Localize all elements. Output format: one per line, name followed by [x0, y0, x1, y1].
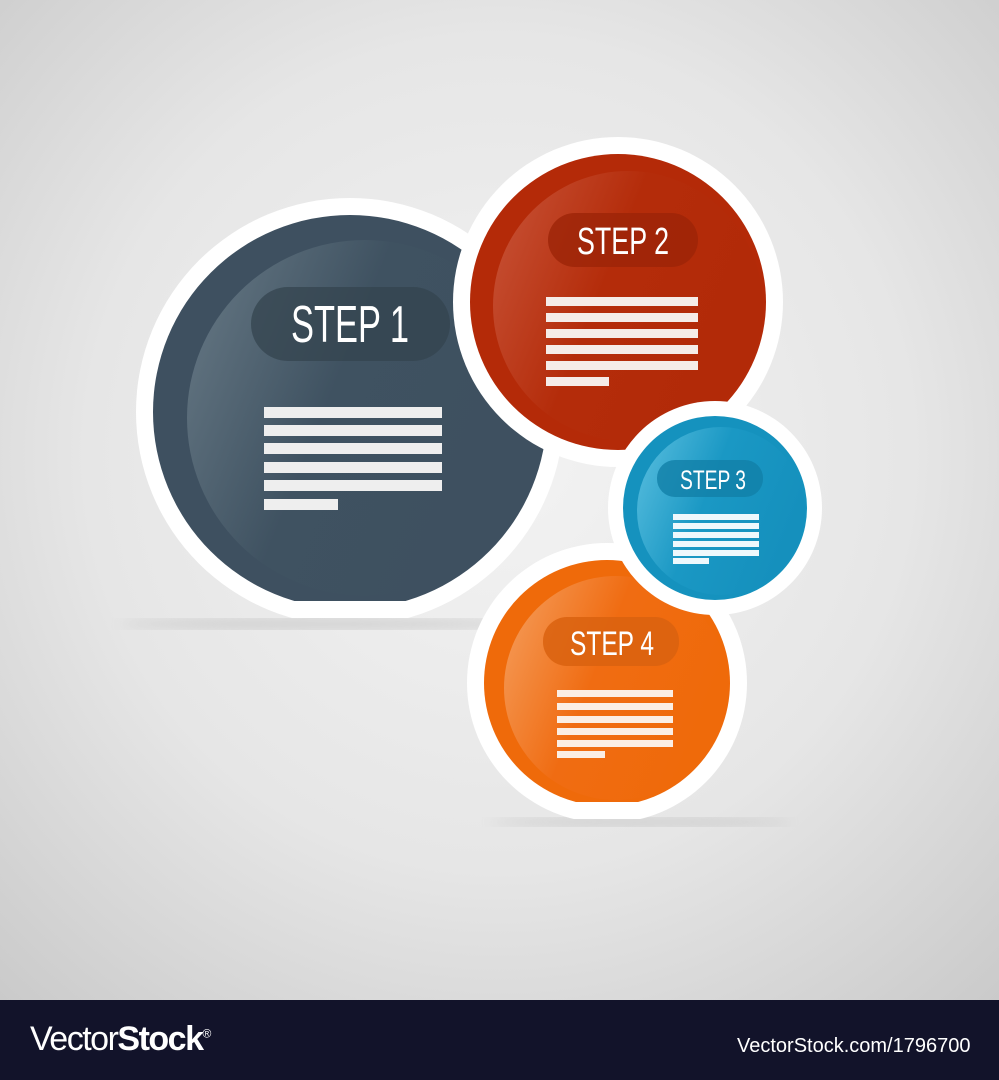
circle: step 3: [608, 401, 822, 615]
pill: STEP 2: STEP 2: [577, 221, 669, 263]
pill: STEP 1: [251, 287, 450, 361]
pill: STEP 4: [543, 617, 679, 666]
shadow: step 1: [120, 619, 540, 629]
text lines: step 4: [557, 690, 673, 758]
circle: step 4: [467, 543, 747, 823]
pill: STEP 1: STEP 1: [291, 296, 409, 354]
text lines: step 3: [673, 514, 759, 564]
text lines: step 1: [264, 407, 442, 510]
pill: STEP 2: [548, 213, 698, 267]
shadow: step 4: [490, 818, 790, 826]
circle: step 2: [453, 137, 783, 467]
circle: step 1: [136, 198, 564, 626]
footer bar: [0, 1000, 999, 1080]
text lines: step 2: [546, 297, 698, 386]
pill: STEP 3: STEP 3: [680, 465, 746, 495]
pill: STEP 3: [657, 460, 763, 497]
pill: STEP 4: STEP 4: [570, 625, 654, 663]
footer url: VectorStock.com/1796700: [737, 1035, 970, 1057]
footer logo: VectorStock®: [30, 1020, 210, 1058]
infographic diagram: [136, 137, 822, 827]
